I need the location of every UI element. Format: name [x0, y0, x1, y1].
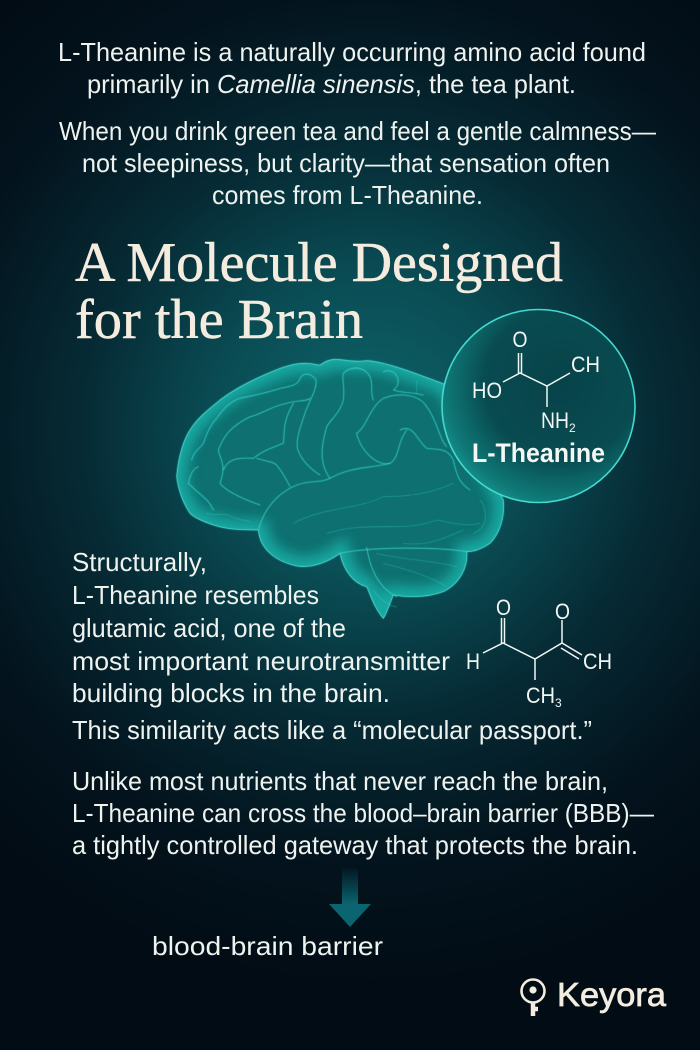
structure paragraph: building blocks in the brain. [72, 678, 390, 708]
barrier paragraph: a tightly controlled gateway that protects the brain. [72, 830, 638, 860]
molecule labels: NH [541, 408, 569, 433]
green tea paragraph [59, 116, 656, 210]
structure paragraph: glutamic acid, one of the [72, 613, 346, 643]
intro paragraph [58, 37, 646, 99]
glutamic acid molecule [466, 595, 612, 710]
arrow label: blood-brain barrier [152, 931, 383, 961]
structure paragraph: Structurally, [72, 547, 207, 577]
molecule labels: O [512, 327, 528, 352]
molecule labels: 2 [569, 421, 576, 435]
barrier paragraph [72, 766, 654, 860]
glutamic acid molecule: CH [526, 683, 555, 708]
callout: L-Theanine molecule lens [442, 310, 635, 502]
molecule labels [472, 327, 600, 435]
title [75, 232, 563, 351]
molecule labels: HO [472, 378, 502, 403]
arrow: down to barrier [329, 866, 371, 927]
logo: Keyora: Keyora [557, 976, 667, 1013]
title: A Molecule Designed [75, 232, 563, 294]
glutamic acid molecule: O [555, 599, 570, 624]
barrier paragraph: L-Theanine can cross the blood–brain barrier (BBB)— [72, 798, 654, 828]
icon: glowing brain [177, 359, 504, 618]
structure paragraph: L-Theanine resembles [72, 580, 319, 610]
glutamic acid molecule: CH [583, 649, 612, 674]
title: for the Brain [75, 289, 363, 351]
intro paragraph: L-Theanine is a naturally occurring amino acid found [58, 37, 646, 67]
glutamic acid molecule: 3 [555, 696, 562, 710]
icon: key [522, 980, 544, 1016]
glutamic acid molecule: H [466, 649, 480, 674]
green tea paragraph: not sleepiness, but clarity—that sensation often [82, 148, 610, 178]
molecule bonds [503, 353, 570, 407]
barrier paragraph: Unlike most nutrients that never reach the brain, [72, 766, 608, 796]
molecule name: L-Theanine [472, 438, 605, 468]
logo: Keyora [522, 976, 667, 1016]
molecule labels: CH [571, 352, 600, 377]
intro paragraph: primarily in Camellia sinensis, the tea plant. [87, 69, 576, 99]
structure paragraph: most important neurotransmitter [72, 646, 450, 676]
structure paragraph [72, 547, 450, 708]
green tea paragraph: comes from L-Theanine. [212, 180, 483, 210]
passport sentence: This similarity acts like a “molecular passport.” [72, 715, 592, 745]
glutamic acid molecule: O [496, 595, 511, 620]
green tea paragraph: When you drink green tea and feel a gentle calmness— [59, 116, 656, 146]
